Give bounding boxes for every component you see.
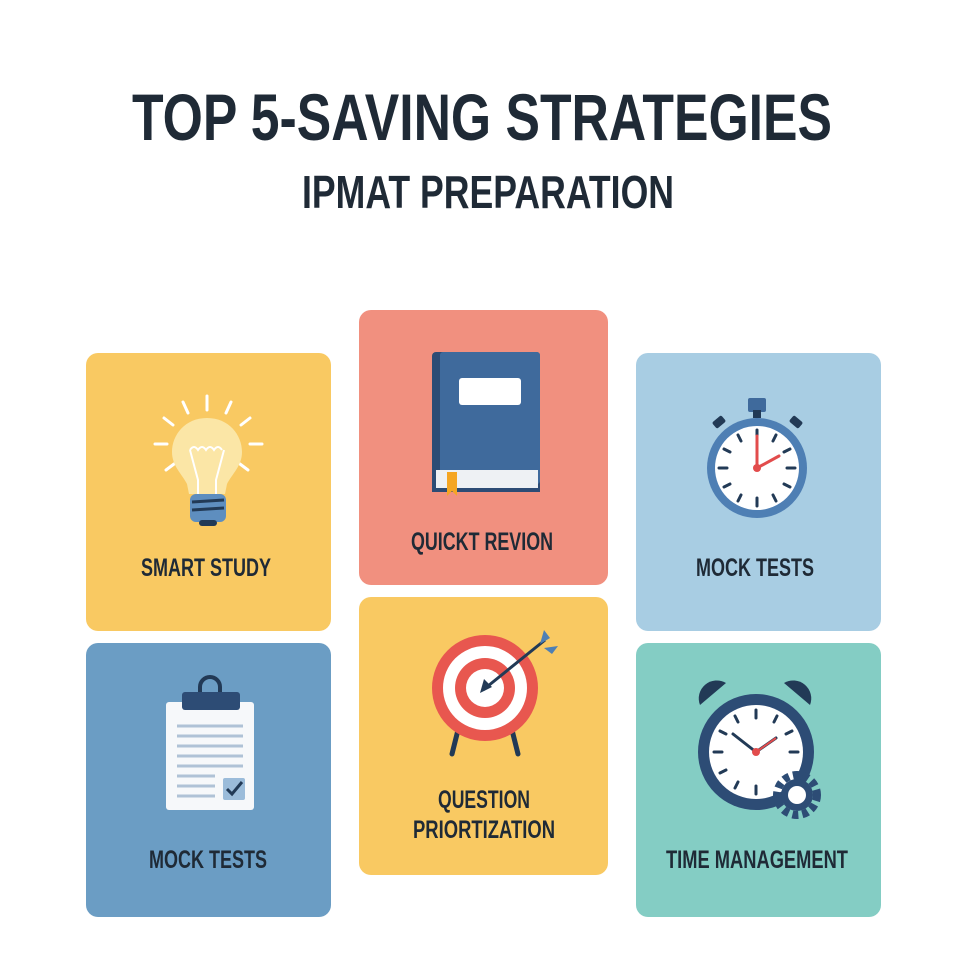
panel: question prioritization: [359, 597, 608, 875]
icon: lightbulb: [155, 396, 262, 526]
label: smart study: SMART STUDY: [141, 554, 271, 582]
panel: question prioritization: PRIORTIZATION: [413, 816, 555, 844]
icon: clipboard: [166, 677, 254, 810]
label: mock tests: MOCK TESTS: [149, 846, 267, 874]
icon: book: [432, 352, 540, 496]
subtitle: IPMAT PREPARATION: [302, 166, 674, 218]
icon: alarm clock: [698, 680, 817, 815]
icon: target: [432, 630, 558, 754]
label: time management: TIME MANAGEMENT: [666, 846, 848, 874]
panel: smart study: [86, 353, 331, 631]
label: quick revision: QUICKT REVION: [411, 528, 553, 556]
label: mock tests: MOCK TESTS: [696, 554, 814, 582]
panel: mock tests top right: [636, 353, 881, 631]
panel: mock tests bottom left: [86, 643, 331, 917]
panel: time management: [636, 643, 881, 917]
panel: quick revision: [359, 310, 608, 585]
icon: stopwatch: [707, 398, 807, 518]
label: question prioritization: QUESTION: [438, 786, 530, 814]
